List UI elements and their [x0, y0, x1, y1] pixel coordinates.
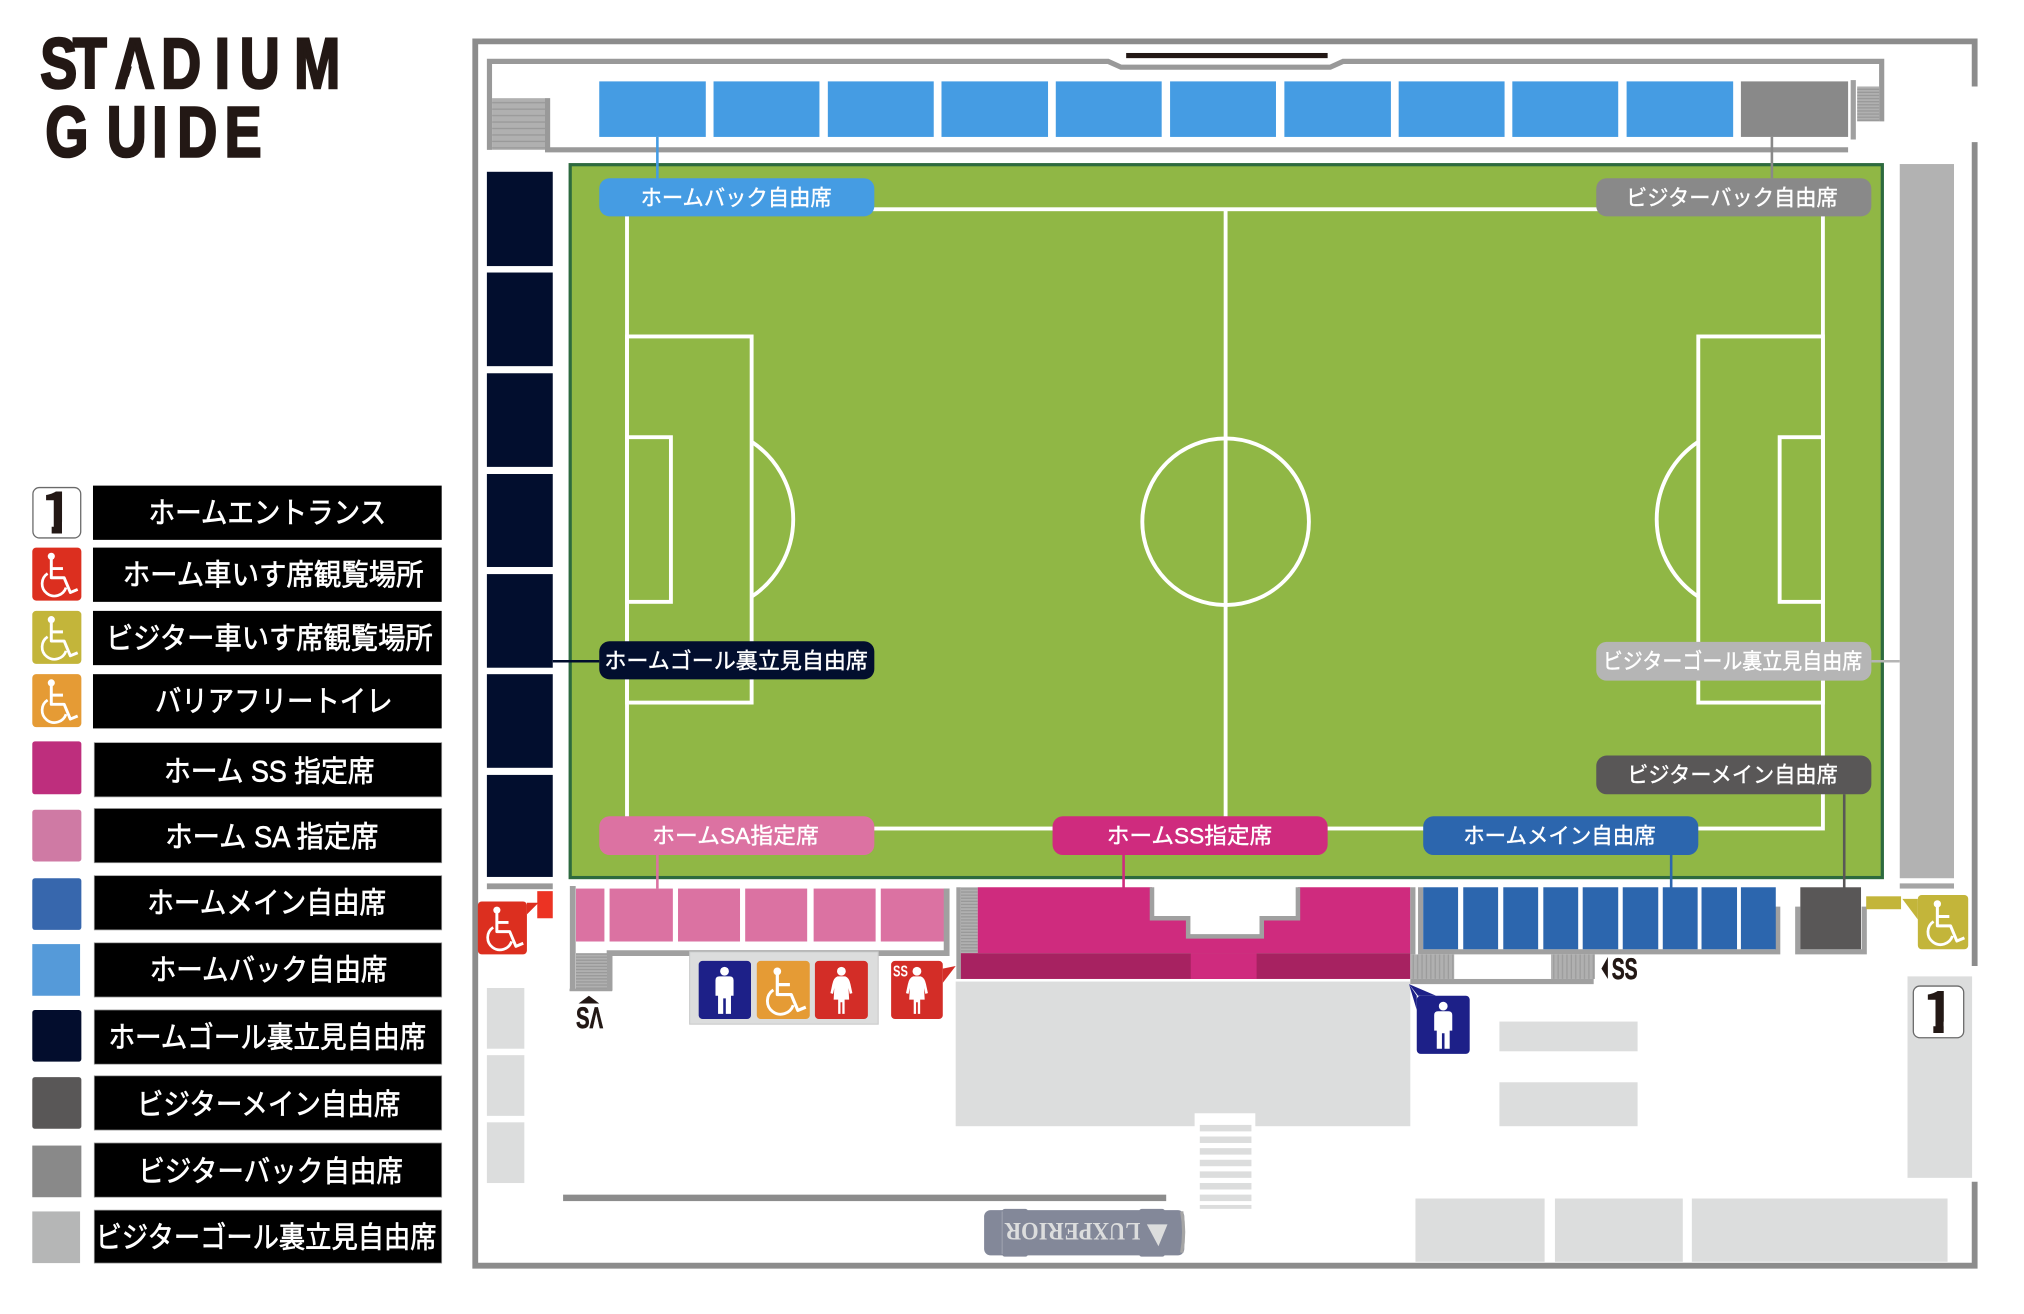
plaza — [956, 982, 1410, 1126]
bus — [984, 1209, 1184, 1257]
stairs — [1551, 954, 1595, 979]
end wall top-right — [1851, 80, 1856, 140]
grass — [570, 165, 1882, 878]
label: home SA reserved — [599, 816, 874, 855]
surrounding buildings — [487, 988, 1948, 1262]
legend row: home main free seating — [32, 876, 442, 930]
SS entrance marker — [1601, 953, 1638, 986]
label: home main free seating — [1423, 816, 1698, 855]
stairs — [1410, 954, 1454, 979]
label: home goal-side standing: ホームゴール裏立見自由席 — [604, 648, 868, 673]
home wheelchair area marker — [537, 891, 553, 918]
legend row: home entrance: ホームエントランス — [149, 497, 386, 530]
entrance number badge: 1 — [1922, 968, 1955, 1050]
SA seats — [576, 889, 944, 942]
icon: men's restroom callout — [1409, 984, 1470, 1054]
legend row: home SA reserved: ホーム SA 指定席 — [165, 821, 378, 854]
legend row: visitor back free seating: ビジターバック自由席 — [138, 1156, 403, 1189]
stairs top-left — [492, 98, 545, 150]
visitor main seats — [1800, 887, 1861, 949]
concourse wall — [1410, 979, 1594, 984]
SA entrance marker: SΛ — [576, 1002, 603, 1035]
entrance number badge — [1913, 968, 1964, 1050]
title: STADIUM — [40, 25, 340, 104]
SS centre aisle — [1191, 953, 1257, 979]
legend row: home entrance: 1 — [40, 468, 74, 550]
visitor goal-side wall — [1900, 883, 1954, 889]
legend row: home back free seating: ホームバック自由席 — [150, 954, 387, 987]
icon: accessible toilet — [757, 961, 810, 1019]
visitor back seats — [1741, 81, 1848, 137]
title — [40, 25, 340, 172]
leader lines — [553, 137, 1900, 889]
label: home back free seating — [599, 178, 874, 216]
home SS stand — [956, 887, 1410, 979]
legend row: visitor goal-side standing — [32, 1210, 442, 1263]
icon: SS women's restroom: SS — [893, 963, 908, 980]
bus: LUXPERIOR — [1004, 1217, 1140, 1246]
home main seats — [1423, 887, 1776, 949]
label: visitor goal-side standing — [1596, 642, 1871, 681]
legend row: visitor wheelchair seating — [32, 611, 442, 665]
label: home back free seating: ホームバック自由席 — [641, 185, 832, 210]
legend row: barrier-free toilet: バリアフリートイレ — [155, 686, 393, 719]
legend — [32, 468, 442, 1263]
label: visitor back free seating: ビジターバック自由席 — [1626, 185, 1838, 210]
SS seats — [978, 887, 1410, 953]
label: home main free seating: ホームメイン自由席 — [1463, 823, 1656, 848]
legend row: home entrance — [33, 468, 442, 550]
SS lower band — [961, 953, 1410, 979]
restroom group — [690, 952, 878, 1024]
legend row: visitor main free seating — [32, 1076, 442, 1130]
home goal-side seats — [487, 172, 553, 877]
label: visitor goal-side standing: ビジターゴール裏立見自由席 — [1603, 649, 1862, 674]
legend row: home SA reserved — [32, 808, 442, 863]
home entrance area — [1908, 968, 1972, 1178]
pitch — [570, 165, 1882, 878]
home back seats — [599, 81, 1733, 137]
icon: men's restroom — [699, 961, 751, 1019]
visitor goal-side stand — [1900, 164, 1954, 878]
main stand walls — [1413, 887, 1778, 954]
legend row: home SS reserved — [32, 741, 442, 797]
visitor main stand — [1798, 887, 1864, 952]
legend row: home back free seating — [32, 943, 442, 997]
legend row: home goal-side standing: ホームゴール裏立見自由席 — [108, 1021, 426, 1054]
icon: SS women's restroom — [891, 961, 956, 1019]
home main stand — [1410, 887, 1778, 986]
label: home SS reserved — [1053, 816, 1328, 855]
black roof bar — [1126, 53, 1328, 58]
label: home SA reserved: ホームSA指定席 — [652, 823, 819, 848]
label: home goal-side standing — [599, 641, 874, 679]
pitch markings — [627, 209, 1823, 829]
label: visitor main free seating: ビジターメイン自由席 — [1627, 763, 1838, 788]
back stand — [489, 53, 1882, 150]
visitor main wall — [1798, 907, 1864, 952]
legend row: home wheelchair seating: ホーム車いす席観覧場所 — [123, 559, 424, 592]
home goal-side wall — [487, 883, 553, 889]
legend row: visitor wheelchair seating: ビジター車いす席観覧場所 — [106, 622, 433, 655]
SS entrance marker: SS — [1612, 953, 1638, 986]
back stand wall — [489, 61, 1882, 150]
title: GUIDE — [45, 93, 262, 172]
road line — [563, 1195, 1166, 1201]
stadium outer wall — [475, 41, 1975, 1266]
icon: home wheelchair — [478, 901, 539, 954]
crosswalk — [1195, 1113, 1255, 1209]
legend row: barrier-free toilet — [32, 674, 442, 728]
stairs top-right — [1857, 87, 1879, 121]
legend row: home goal-side standing — [32, 1010, 442, 1064]
SS notch wall — [1152, 887, 1298, 936]
SA wall — [573, 886, 947, 991]
legend row: home wheelchair seating — [32, 548, 442, 602]
legend row: visitor main free seating: ビジターメイン自由席 — [137, 1089, 400, 1122]
legend row: home main free seating: ホームメイン自由席 — [147, 887, 386, 920]
SA stairs — [576, 953, 607, 989]
SS stairs — [961, 887, 978, 953]
SA entrance marker — [576, 996, 603, 1035]
legend row: visitor goal-side standing: ビジターゴール裏立見自由席 — [96, 1222, 437, 1255]
visitor wheelchair area marker — [1866, 896, 1901, 909]
home SA stand — [570, 886, 947, 1035]
label: visitor back free seating — [1596, 178, 1871, 216]
label: visitor main free seating — [1596, 756, 1871, 794]
legend row: home SS reserved: ホーム SS 指定席 — [164, 755, 375, 788]
icon: visitor wheelchair — [1902, 895, 1968, 949]
icon: women's restroom — [815, 961, 868, 1019]
label: home SS reserved: ホームSS指定席 — [1107, 823, 1272, 848]
SA wall bottom — [570, 989, 612, 991]
back stand lower wall — [548, 98, 1848, 150]
legend row: visitor back free seating — [32, 1143, 442, 1197]
SS stairs wall — [956, 887, 961, 979]
